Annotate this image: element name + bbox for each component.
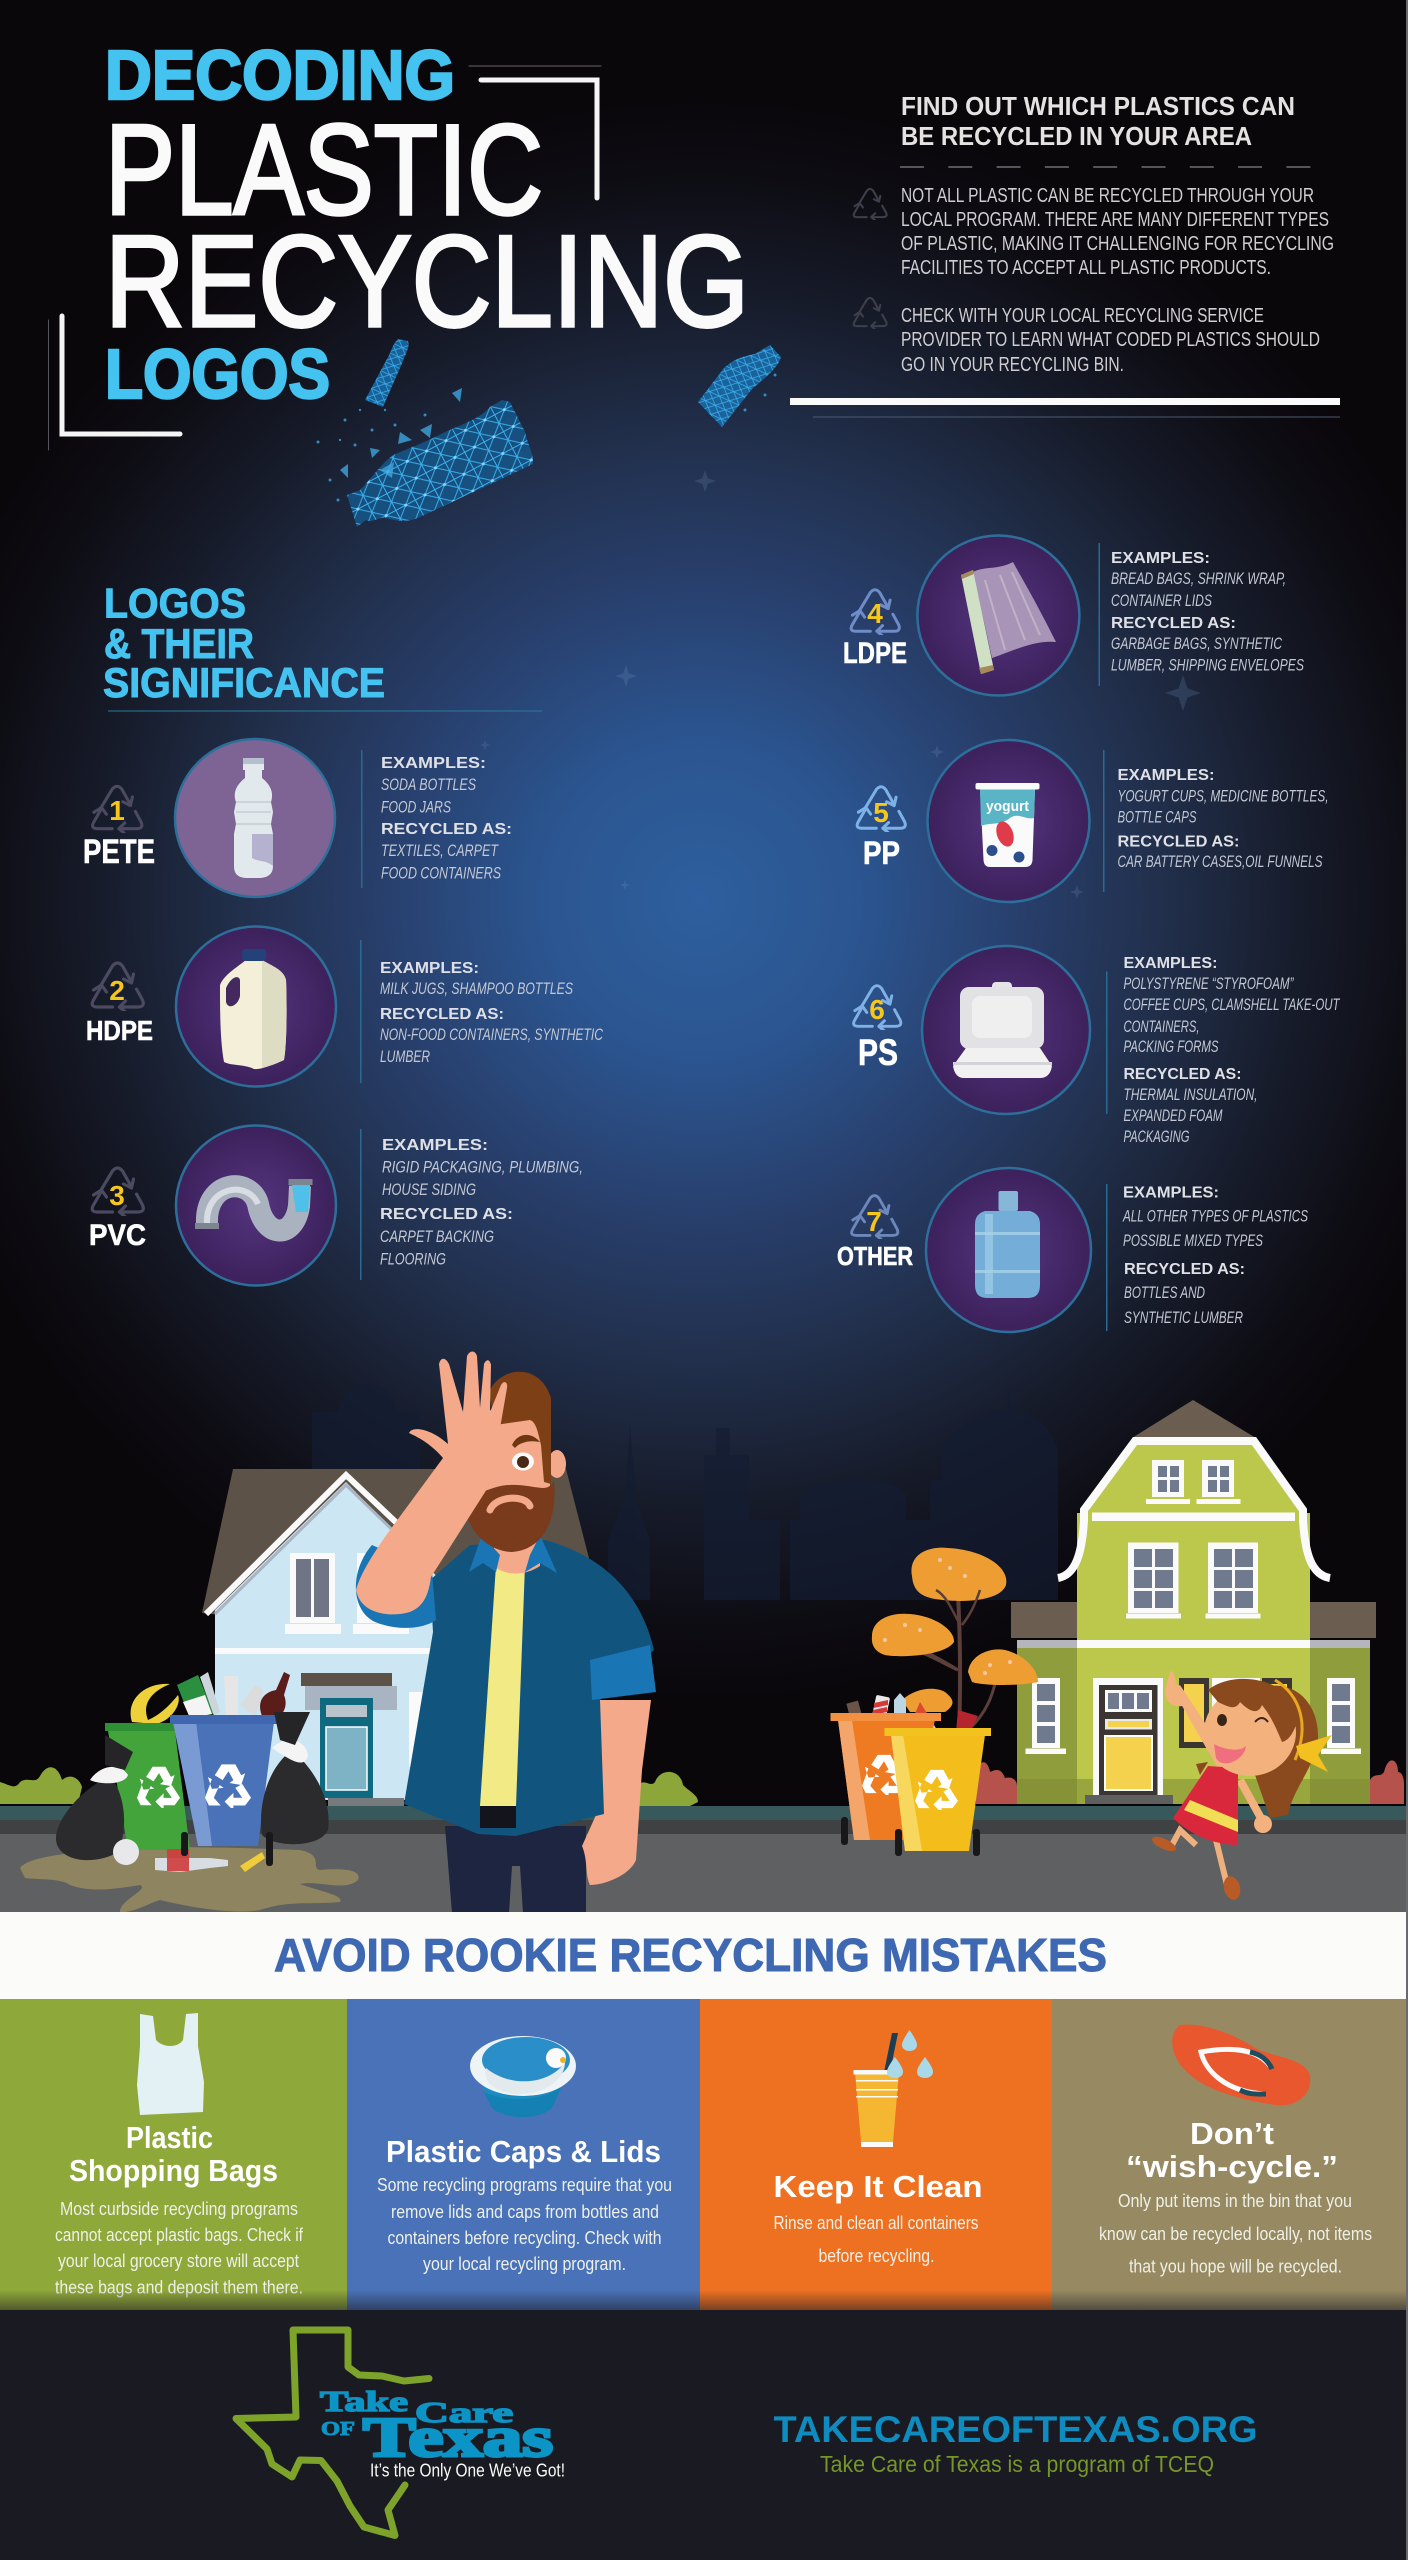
text: wish-cycle body: that you hope will be recycled.: [1129, 2256, 1342, 2276]
background: [0, 0, 1408, 1912]
text: PETE details: [381, 755, 512, 882]
text: PS details: PACKAGING: [1124, 1127, 1190, 1146]
badge: 4 LDPE: LDPE: [843, 637, 907, 670]
heading: plastic shopping bags: [69, 2120, 278, 2188]
logo tagline: It’s the Only One We’ve Got!: [370, 2460, 565, 2480]
text: PETE details: EXAMPLES:: [381, 755, 486, 772]
footer background: [0, 2310, 1408, 2560]
text: wish-cycle body: know can be recycled locally, not items: [1099, 2224, 1372, 2244]
text: PP details: CAR BATTERY CASES,OIL FUNNELS: [1118, 852, 1323, 871]
title: PLASTIC: [105, 99, 543, 242]
trash on top: [131, 1672, 290, 1724]
logo wordmark: Take: [320, 2386, 408, 2418]
text: PVC details: [380, 1137, 583, 1268]
badge: 2 HDPE: [86, 963, 153, 1046]
icon: left bushes: [0, 1767, 698, 1806]
text: bags body: cannot accept plastic bags. Check if: [55, 2225, 304, 2245]
heading: logos and their significance: SIGNIFICANCE: [103, 659, 385, 706]
heading: don't wish-cycle: “wish-cycle.”: [1126, 2149, 1338, 2184]
text: PP details: BOTTLE CAPS: [1118, 808, 1197, 826]
badge: 1 PETE: PETE: [83, 833, 155, 871]
panel shadow: [0, 2290, 1408, 2310]
text: PETE details: FOOD CONTAINERS: [381, 864, 501, 882]
heading: logos and their significance: [103, 580, 542, 712]
icon: flip flop: [1172, 2025, 1310, 2105]
badge: 6 PS: PS: [858, 1032, 898, 1073]
row: 4 LDPE: [843, 536, 1304, 696]
badge: 1 PETE: 1: [109, 795, 125, 826]
bin contents: [846, 1693, 978, 1736]
text: LDPE details: BREAD BAGS, SHRINK WRAP,: [1111, 569, 1286, 588]
door: [1085, 1678, 1173, 1804]
text: OTHER details: BOTTLES AND: [1124, 1283, 1205, 1302]
text: caps body: containers before recycling. Check with: [388, 2228, 662, 2248]
orange bin: [830, 1713, 941, 1845]
text: LDPE details: CONTAINER LIDS: [1111, 591, 1212, 610]
text: OTHER details: [1122, 1184, 1308, 1327]
man head: [464, 1372, 566, 1552]
text: bags body: these bags and deposit them there.: [55, 2278, 303, 2298]
text: clean body: before recycling.: [818, 2246, 934, 2266]
text: OTHER details: SYNTHETIC LUMBER: [1124, 1308, 1243, 1327]
text: check paragraph: [901, 305, 1320, 376]
row: 7 OTHER: [837, 1168, 1308, 1332]
circle: bottle: [175, 739, 335, 897]
text: intro paragraph: FACILITIES TO ACCEPT ALL PLASTIC PRODUCTS.: [901, 257, 1271, 279]
badge: 6 PS: [854, 986, 901, 1073]
logo wordmark: [320, 2386, 553, 2469]
scene: street: [0, 1806, 1408, 1912]
scene: green house: [976, 1400, 1404, 1804]
text: clean body: [774, 2213, 978, 2266]
man right forearm and hand: [582, 1700, 651, 1885]
panel: plastic caps and lids: [347, 1999, 700, 2310]
icon: faint recycling triangle 1: [854, 189, 887, 220]
icon: cup with straw and drops: [854, 2030, 933, 2147]
text: HDPE details: EXAMPLES:: [380, 960, 479, 977]
text: PS details: EXPANDED FOAM: [1124, 1106, 1223, 1125]
text: PVC details: EXAMPLES:: [382, 1137, 488, 1154]
logo wordmark: Care: [415, 2397, 513, 2429]
circle: pipe: [176, 1126, 336, 1286]
icon: texas outline: [236, 2330, 429, 2536]
text: HDPE details: RECYCLED AS:: [380, 1006, 504, 1023]
text: PVC details: RECYCLED AS:: [380, 1206, 513, 1223]
faint stars: [480, 470, 1201, 899]
badge: 7 OTHER: [837, 1196, 913, 1271]
text: PVC details: FLOORING: [380, 1250, 446, 1268]
text: PVC details: RIGID PACKAGING, PLUMBING,: [382, 1158, 583, 1176]
icon: plastic bag: [137, 2013, 204, 2115]
text: caps body: remove lids and caps from bottles and: [391, 2202, 659, 2222]
scene: left bins and trash: [20, 1672, 359, 1913]
scene: right bins: [830, 1693, 991, 1856]
text: OTHER details: ALL OTHER TYPES OF PLASTICS: [1122, 1206, 1308, 1226]
pink bushes: [976, 1760, 1404, 1804]
text: PP details: RECYCLED AS:: [1118, 834, 1240, 850]
text: caps body: [377, 2175, 672, 2274]
logo: take care of texas: [236, 2330, 565, 2536]
row: 2 HDPE: [86, 926, 604, 1086]
badge: 2 HDPE: HDPE: [86, 1015, 153, 1046]
text: LDPE details: [1111, 550, 1304, 674]
heading: don't wish-cycle: Don’t: [1190, 2116, 1274, 2151]
text: intro paragraph: [901, 185, 1334, 279]
badge: 1 PETE: [83, 786, 155, 871]
text: PS details: RECYCLED AS:: [1124, 1066, 1242, 1083]
man raised arm: [356, 1352, 507, 1628]
text: wish-cycle body: Only put items in the bin that you: [1118, 2191, 1352, 2211]
badge: 2 HDPE: 2: [109, 975, 125, 1006]
text: HDPE details: NON-FOOD CONTAINERS, SYNTHETIC: [380, 1025, 604, 1044]
man shirt: [404, 1535, 656, 1836]
footer url: [774, 2409, 1258, 2477]
text: PS details: THERMAL INSULATION,: [1124, 1085, 1258, 1104]
upper windows: [1126, 1542, 1260, 1618]
text: OTHER details: RECYCLED AS:: [1124, 1261, 1245, 1278]
dormer windows: [1146, 1460, 1240, 1504]
text: LDPE details: LUMBER, SHIPPING ENVELOPES: [1111, 656, 1304, 674]
character: girl pointing: [1150, 1671, 1332, 1902]
circle: yogurt cup: yogurt: [986, 798, 1029, 815]
title: [105, 36, 749, 413]
badge: 3 PVC: [89, 1168, 146, 1252]
text: PS details: POLYSTYRENE “STYROFOAM”: [1124, 974, 1294, 993]
side windows: [1026, 1678, 1361, 1754]
badge: 3 PVC: 3: [109, 1180, 125, 1211]
puddle: [20, 1847, 359, 1913]
text: caps body: Some recycling programs require that you: [377, 2175, 672, 2195]
heading: caps and lids: Plastic Caps & Lids: [386, 2134, 661, 2169]
footer url: TAKECAREOFTEXAS.ORG: [774, 2409, 1258, 2450]
text: LDPE details: EXAMPLES:: [1111, 550, 1210, 567]
text: wish-cycle body: [1099, 2191, 1372, 2276]
circle: clamshell: [922, 946, 1090, 1114]
green bin: [105, 1723, 190, 1850]
row: 5 PP: [857, 740, 1328, 902]
blue bin: [170, 1715, 286, 1846]
badge: 5 PP: 5: [873, 797, 889, 828]
title: RECYCLING: [105, 208, 749, 354]
heading: plastic shopping bags: Shopping Bags: [69, 2153, 278, 2188]
row: 3 PVC: [89, 1126, 583, 1286]
text: check paragraph: GO IN YOUR RECYCLING BIN.: [901, 354, 1124, 376]
yellow lit windows: [1179, 1678, 1292, 1748]
panel: plastic shopping bags: [0, 1999, 347, 2310]
man legs: [445, 1826, 586, 1913]
text: PETE details: RECYCLED AS:: [381, 821, 512, 838]
badge: 4 LDPE: 4: [867, 598, 883, 629]
panel: don't wish-cycle: [1052, 1999, 1408, 2310]
text: clean body: Rinse and clean all containers: [774, 2213, 978, 2233]
badge: 7 OTHER: 7: [866, 1206, 882, 1237]
heading: logos and their significance: & THEIR: [104, 620, 254, 667]
heading: find out: FIND OUT WHICH PLASTICS CAN: [901, 91, 1295, 121]
yellow bin: [884, 1728, 991, 1856]
text: LDPE details: RECYCLED AS:: [1111, 615, 1236, 632]
heading: don't wish-cycle: [1126, 2116, 1338, 2184]
text: PVC details: HOUSE SIDING: [382, 1180, 476, 1199]
badge: 3 PVC: PVC: [89, 1219, 146, 1252]
text: OTHER details: POSSIBLE MIXED TYPES: [1123, 1231, 1263, 1250]
badge: 5 PP: PP: [863, 835, 900, 871]
text: HDPE details: LUMBER: [380, 1047, 430, 1066]
text: PS details: PACKING FORMS: [1124, 1037, 1219, 1056]
text: PS details: CONTAINERS,: [1124, 1017, 1200, 1036]
heading: find out: [901, 91, 1295, 151]
title: DECODING: [105, 36, 455, 114]
text: PP details: [1118, 767, 1328, 871]
icon: mesh bottles: [316, 339, 781, 527]
heading: plastic shopping bags: Plastic: [126, 2120, 213, 2155]
panel: find out intro: [790, 91, 1340, 418]
text: bags body: [55, 2199, 304, 2298]
loose trash: [113, 1832, 273, 1872]
row: 6 PS: [854, 946, 1341, 1146]
text: bags body: Most curbside recycling programs: [60, 2199, 298, 2219]
text: OTHER details: EXAMPLES:: [1123, 1184, 1219, 1202]
band: avoid rookie mistakes heading: AVOID ROOKIE RECYCLING MISTAKES: [274, 1929, 1107, 1981]
circle: milk jug: [176, 926, 336, 1086]
icon: faint recycling triangle 2: [854, 298, 887, 329]
scene: city skyline silhouette: [312, 1383, 1058, 1600]
text: LDPE details: GARBAGE BAGS, SYNTHETIC: [1111, 634, 1283, 653]
circle: yogurt cup: [928, 740, 1090, 902]
logo wordmark: OF: [321, 2418, 355, 2440]
trash bags: [56, 1712, 329, 1860]
text: PETE details: SODA BOTTLES: [381, 775, 476, 794]
circle: water jug: [926, 1168, 1091, 1332]
text: HDPE details: [380, 960, 604, 1066]
scene: autumn tree: [872, 1548, 1038, 1730]
text: PVC details: CARPET BACKING: [380, 1227, 494, 1246]
text: HDPE details: MILK JUGS, SHAMPOO BOTTLES: [380, 979, 573, 998]
icon: tub with lid: [470, 2036, 576, 2117]
text: PS details: [1124, 955, 1341, 1146]
badge: 5 PP: [857, 787, 905, 871]
badge: 7 OTHER: OTHER: [837, 1241, 913, 1271]
text: PETE details: FOOD JARS: [381, 798, 451, 816]
row: 1 PETE: [83, 739, 512, 897]
title brackets: [48, 66, 601, 450]
heading: logos and their significance: LOGOS: [104, 580, 246, 626]
text: check paragraph: CHECK WITH YOUR LOCAL RECYCLING SERVICE: [901, 305, 1264, 327]
footer url: Take Care of Texas is a program of TCEQ: [820, 2451, 1214, 2477]
character: bearded man: [356, 1352, 656, 1913]
heading: keep it clean: Keep It Clean: [774, 2169, 982, 2204]
text: PS details: EXAMPLES:: [1124, 955, 1218, 972]
heading: find out: BE RECYCLED IN YOUR AREA: [901, 121, 1252, 151]
text: PP details: EXAMPLES:: [1118, 767, 1214, 784]
badge: 4 LDPE: [843, 590, 907, 670]
badge: 6 PS: 6: [869, 994, 885, 1025]
text: bags body: your local grocery store will accept: [58, 2251, 299, 2271]
scene: blue house: [202, 1469, 592, 1806]
text: caps body: your local recycling program.: [423, 2254, 626, 2274]
text: PETE details: TEXTILES, CARPET: [381, 841, 499, 860]
panel: keep it clean: [700, 1999, 1052, 2310]
logo wordmark: Texas: [363, 2407, 553, 2469]
band: avoid rookie mistakes heading: [0, 1912, 1408, 1999]
circle: plastic wrap: [917, 536, 1079, 696]
title: LOGOS: [105, 335, 330, 413]
